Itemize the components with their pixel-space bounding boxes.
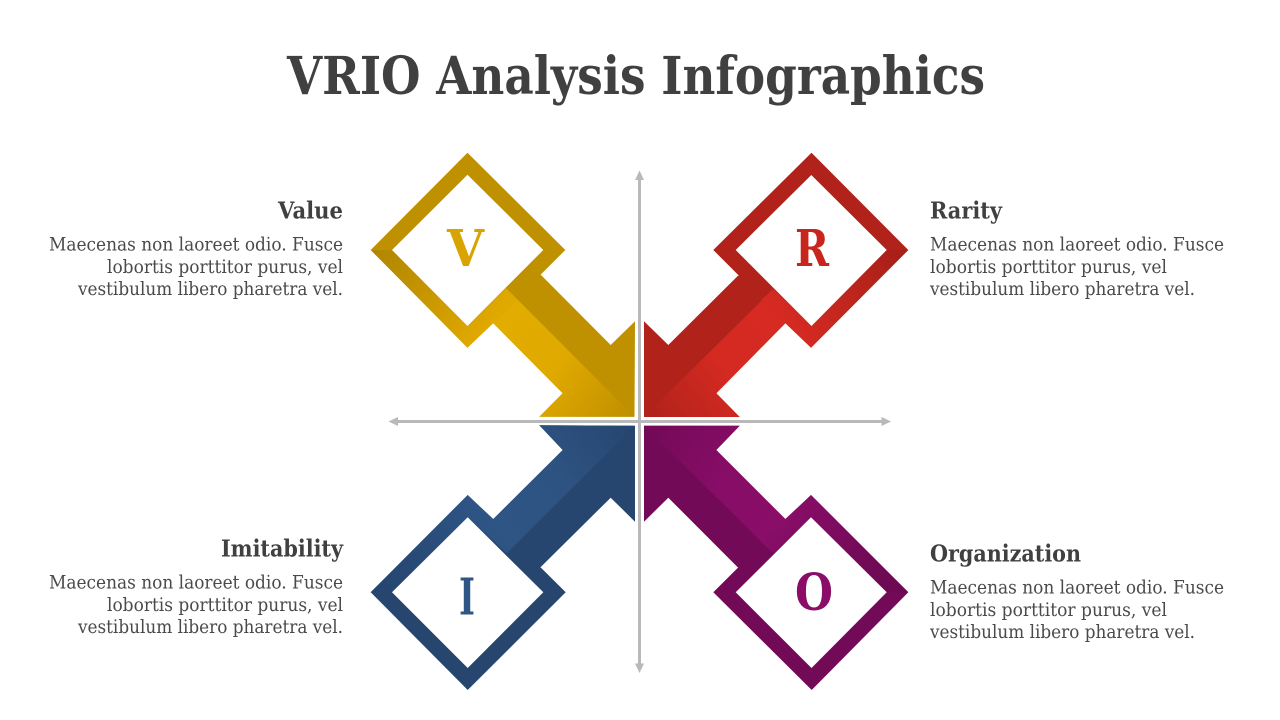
- panel: Rarity: [644, 153, 1224, 417]
- arrow: gold: [467, 260, 635, 417]
- letter R: R: [795, 219, 830, 278]
- text block: Rarity: lobortis porttitor purus, vel: [930, 257, 1167, 278]
- letter I: I: [459, 568, 475, 626]
- text block: Imitability: Maecenas non laoreet odio. Fusce: [49, 572, 343, 594]
- panel: Value: [49, 153, 635, 417]
- text block: Value: vestibulum libero pharetra vel.: [77, 279, 343, 300]
- text block: Organization: [929, 578, 1224, 643]
- vertical axis arrow: [635, 170, 644, 673]
- heading: Value: Value: [277, 196, 343, 224]
- text block: Rarity: vestibulum libero pharetra vel.: [929, 279, 1195, 300]
- panel: Imitability: [49, 425, 635, 690]
- heading: Imitability: Imitability: [221, 534, 344, 562]
- icon: gold diamond frame: [371, 153, 565, 348]
- text block: Imitability: [49, 572, 343, 638]
- text block: Value: [49, 234, 343, 300]
- text block: Rarity: Maecenas non laoreet odio. Fusce: [930, 234, 1224, 256]
- text block: Value: lobortis porttitor purus, vel: [107, 257, 343, 278]
- horizontal axis arrow: [388, 417, 891, 426]
- text block: Rarity: [929, 234, 1224, 300]
- icon: blue diamond frame: [371, 495, 566, 690]
- heading: Rarity: Rarity: [930, 196, 1003, 224]
- text block: Imitability: lobortis porttitor purus, vel: [107, 595, 343, 616]
- letter V: V: [446, 219, 485, 278]
- heading: Organization: Organization: [930, 540, 1081, 568]
- icon: red diamond frame: [713, 153, 908, 348]
- panel: Organization: [644, 426, 1224, 690]
- text block: Imitability: vestibulum libero pharetra vel.: [77, 617, 343, 638]
- text block: Organization: vestibulum libero pharetra vel.: [929, 622, 1195, 643]
- arrow: blue: [467, 425, 635, 582]
- text block: Value: Maecenas non laoreet odio. Fusce: [49, 234, 343, 256]
- icon: purple diamond frame: [713, 495, 908, 690]
- letter O: O: [795, 563, 833, 622]
- arrow: purple: [644, 426, 812, 582]
- text block: Organization: Maecenas non laoreet odio. Fusce: [930, 578, 1224, 598]
- arrow: red: [644, 260, 812, 417]
- text block: Organization: lobortis porttitor purus, vel: [930, 600, 1167, 621]
- title: VRIO Analysis Infographics: [286, 46, 985, 107]
